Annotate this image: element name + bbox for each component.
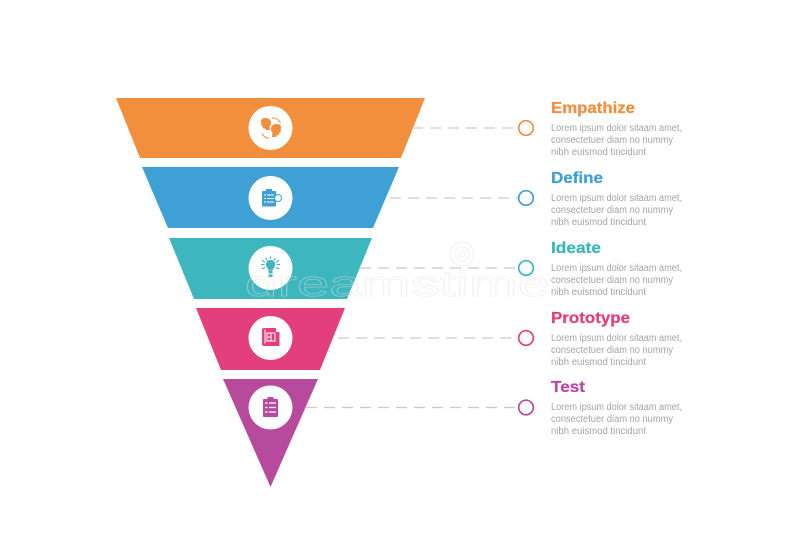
icon: empathize heads [248,106,292,150]
marker: define [519,191,533,205]
text block: ideate [551,240,682,298]
icon: ideate light bulb [248,246,292,290]
funnel band: test [223,379,318,487]
text block: test [551,379,682,437]
text block: define: Lorem ipsum dolor sitaam amet, [551,193,682,204]
text block: empathize: Empathize [551,100,635,117]
watermark: dreamstime [245,263,550,304]
text block: prototype: Lorem ipsum dolor sitaam amet, [551,333,682,344]
funnel [116,98,425,487]
text block: prototype: Prototype [551,310,630,327]
funnel band: define [142,167,399,228]
text block: ideate: Lorem ipsum dolor sitaam amet, [551,263,682,274]
text block: empathize: consectetuer diam no nummy [551,135,673,146]
marker: ideate [519,261,533,275]
marker: test [519,400,533,415]
icon: test checklist [248,386,292,430]
marker: empathize [519,121,533,135]
text block: define [551,170,682,228]
icon: define clipboard [248,176,292,220]
text block: test: Test [551,379,585,396]
text block: ideate: Ideate [551,240,601,257]
text block: define: nibh euismod tincidunt [551,217,646,228]
watermark [245,242,550,304]
text block: define: Define [551,170,603,187]
text block: prototype [551,310,682,368]
funnel band: prototype [196,308,345,370]
funnel band: empathize [116,98,425,158]
text block: define: consectetuer diam no nummy [551,205,673,216]
text block: test: nibh euismod tincidunt [551,426,646,437]
text block: prototype: consectetuer diam no nummy [551,345,673,356]
text block: test: consectetuer diam no nummy [551,414,673,425]
text block: empathize: Lorem ipsum dolor sitaam amet, [551,123,682,134]
connector lines [306,128,518,408]
text block: ideate: consectetuer diam no nummy [551,275,673,286]
text block: test: Lorem ipsum dolor sitaam amet, [551,402,682,413]
text block: prototype: nibh euismod tincidunt [551,357,646,368]
text block: empathize: nibh euismod tincidunt [551,147,646,158]
funnel band: ideate [169,238,372,299]
text block: ideate: nibh euismod tincidunt [551,287,646,298]
icon: prototype blueprint [248,316,292,360]
marker: prototype [519,331,533,345]
text block: empathize [551,100,682,158]
